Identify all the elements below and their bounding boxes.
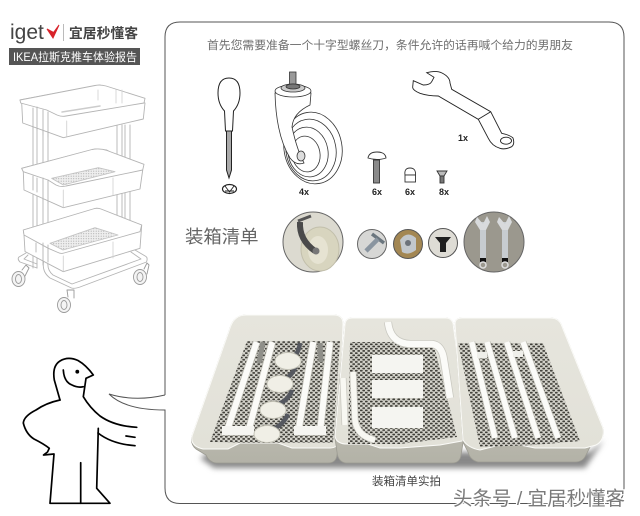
rounded speech panel	[109, 22, 624, 504]
logo: iget	[10, 21, 44, 44]
photo: cap nut	[394, 230, 422, 258]
bottom tray	[23, 208, 142, 272]
photo: caster	[283, 212, 343, 272]
icon: screwdriver	[218, 78, 240, 194]
wheels	[12, 263, 149, 312]
ikea man figure	[23, 358, 137, 503]
right tray	[455, 318, 603, 462]
report title banner	[9, 48, 140, 65]
parts quantities: 4x	[299, 187, 309, 197]
parts quantities	[299, 133, 468, 197]
middle tray	[22, 149, 144, 208]
watermark: 头条号 / 宜居秒懂客	[453, 488, 625, 510]
illustration: three-tier cart	[12, 85, 149, 312]
logo: 宜居秒懂客	[69, 25, 138, 41]
shadow	[200, 440, 604, 468]
icon: cap nut	[405, 168, 416, 182]
instruction text: 首先您需要准备一个十字型螺丝刀，条件允许的话再喊个给力的男朋友	[207, 38, 573, 52]
photo: bolt	[358, 230, 386, 258]
icon: carriage bolt	[368, 152, 386, 183]
parts quantities: 6x	[372, 187, 382, 197]
casters in tray	[254, 343, 301, 442]
photo: black screw	[428, 228, 458, 258]
logo	[10, 21, 138, 44]
heading: packing list: 装箱清单	[185, 226, 259, 247]
top tray	[20, 85, 145, 138]
middle tray	[334, 318, 468, 463]
left tray	[192, 315, 343, 463]
photo: opened packing trays	[192, 315, 604, 468]
parts quantities: 1x	[458, 133, 468, 143]
icon: flat head screw	[437, 171, 447, 183]
report title banner: IKEA拉斯克推车体验报告	[13, 50, 137, 64]
photo caption: 装箱清单实拍	[372, 474, 441, 488]
parts quantities: 6x	[405, 187, 415, 197]
parts quantities: 8x	[439, 187, 449, 197]
icon: wrench	[413, 71, 514, 149]
icon: caster wheel diagram	[275, 72, 348, 188]
photo: two wrenches	[464, 212, 524, 272]
